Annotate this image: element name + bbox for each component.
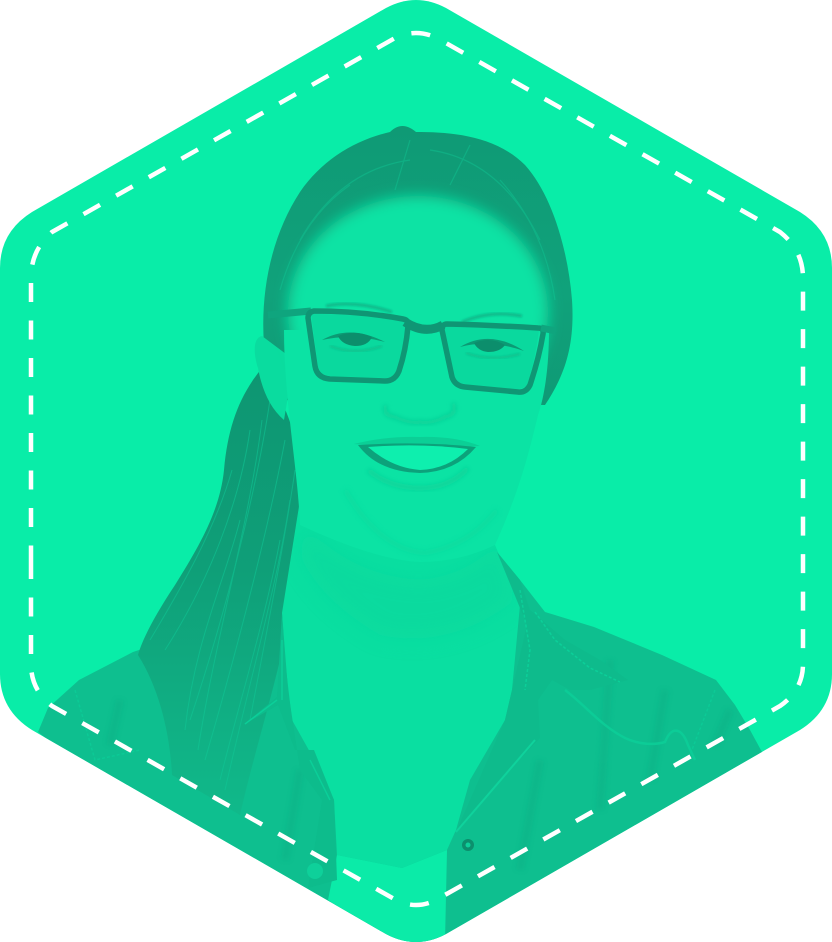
woman portrait [38, 126, 762, 942]
left temple [268, 311, 311, 315]
hair strands [280, 140, 555, 300]
shirt button [307, 863, 323, 879]
left placket stitching [245, 640, 330, 800]
neck and chest [282, 500, 520, 868]
left lens tint [311, 314, 406, 378]
left eyebrow [326, 304, 392, 312]
right collar [497, 552, 520, 720]
eyelet center [466, 842, 470, 848]
forehead with soft hairline [280, 188, 556, 350]
chin contour [345, 490, 497, 553]
left eye [322, 332, 385, 351]
head hair [263, 126, 573, 405]
right eye [460, 339, 524, 358]
sleeve seam [75, 690, 715, 760]
mouth [354, 437, 480, 488]
right collar edge [456, 740, 535, 832]
undershirt [328, 850, 447, 942]
shirt eyelet [462, 839, 474, 851]
right eyebrow [462, 314, 522, 322]
ear [254, 336, 288, 420]
ponytail strands [150, 400, 295, 790]
pocket seam [565, 690, 695, 760]
left lens frame [308, 311, 408, 381]
upper lip [355, 437, 480, 446]
right temple [541, 328, 556, 331]
ponytail [138, 368, 302, 815]
teeth [368, 445, 468, 470]
right lens tint [443, 326, 539, 389]
denim shirt [38, 552, 762, 942]
left collar [253, 616, 337, 882]
shirt folds [110, 660, 730, 870]
neck shadow [300, 525, 515, 638]
mouth opening [358, 443, 476, 473]
nose [385, 403, 454, 422]
right collar stitching [520, 590, 620, 690]
glasses [268, 311, 556, 392]
bridge [405, 322, 443, 329]
lower lip shadow [368, 468, 468, 488]
face [284, 330, 549, 562]
right lens frame [442, 324, 543, 392]
